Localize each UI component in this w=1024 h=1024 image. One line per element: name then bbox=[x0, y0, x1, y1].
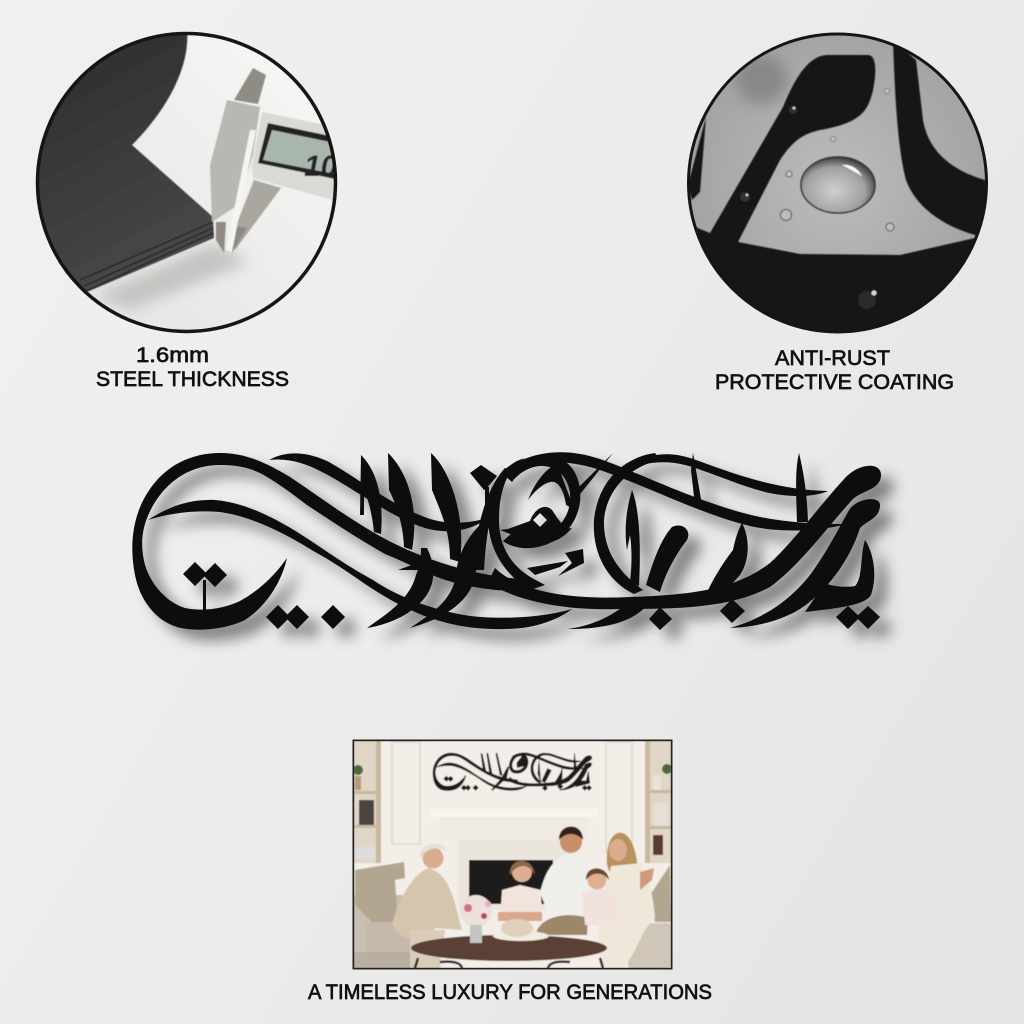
artwork: metal calligraphy panel bbox=[132, 452, 881, 630]
water droplets bbox=[740, 88, 894, 309]
caption: steel thickness: 1.6mm bbox=[136, 344, 209, 367]
panel: anti-rust coating circle bbox=[680, 34, 1000, 340]
miniature calligraphy on wall bbox=[433, 753, 592, 791]
large curved arc bbox=[594, 453, 660, 594]
caption: steel thickness bbox=[96, 344, 289, 391]
room wall bbox=[354, 741, 671, 968]
caption: anti-rust coating: ANTI-RUST bbox=[775, 346, 890, 370]
caption: family: A TIMELESS LUXURY FOR GENERATIONS bbox=[308, 981, 712, 1004]
panel: steel thickness circle bbox=[20, 30, 340, 332]
main bowl sweeping to upper right bbox=[488, 466, 881, 609]
flower vase bbox=[460, 895, 492, 943]
lower diagonal sweeps bbox=[367, 468, 512, 628]
digital caliper bbox=[210, 68, 340, 253]
coffee table bbox=[411, 935, 607, 968]
caption: anti-rust coating bbox=[715, 346, 954, 394]
fireplace bbox=[430, 809, 597, 910]
grandmother bbox=[392, 843, 462, 968]
left bookshelf bbox=[353, 741, 381, 863]
caption: steel thickness: STEEL THICKNESS bbox=[96, 367, 289, 391]
bottom flick bbox=[568, 598, 652, 629]
wavy line upper bbox=[627, 454, 828, 496]
wall panels bbox=[392, 742, 632, 852]
father bbox=[536, 826, 588, 936]
final ya swash bbox=[730, 499, 880, 628]
inner sweep stroke bbox=[148, 500, 572, 629]
grey shading bbox=[736, 56, 788, 104]
panel: family living room photo bbox=[352, 740, 672, 970]
alif strokes bbox=[626, 453, 808, 597]
caliper reading: 10 bbox=[304, 150, 338, 183]
thin arc stroke bbox=[269, 453, 488, 531]
mother bbox=[598, 833, 655, 967]
diamond dots bbox=[183, 562, 880, 630]
black steel strokes bbox=[690, 46, 985, 330]
ha ring and knot bbox=[470, 453, 613, 590]
outer loop stroke bbox=[132, 453, 530, 630]
right bookshelf bbox=[645, 741, 672, 863]
wavy line lower bbox=[505, 452, 847, 530]
dessert plate bbox=[493, 919, 549, 941]
older girl bbox=[498, 861, 542, 921]
sofa bbox=[354, 862, 671, 968]
younger girl bbox=[582, 868, 610, 926]
caption: anti-rust coating: PROTECTIVE COATING bbox=[715, 370, 954, 394]
steel sheet stack bbox=[39, 35, 215, 292]
tapering alif spikes bbox=[360, 453, 461, 562]
